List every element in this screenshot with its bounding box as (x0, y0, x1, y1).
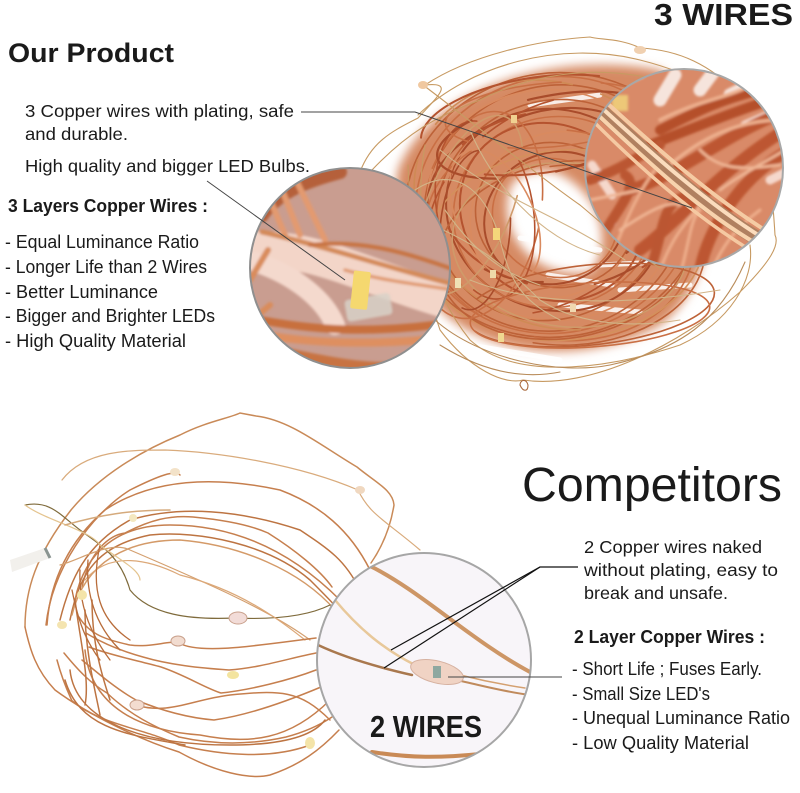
list: product benefits: - High Quality Material (5, 330, 186, 351)
list: product benefits: - Bigger and Brighter LEDs (5, 305, 215, 326)
text block: product callouts (25, 101, 310, 176)
label: 2 wires: 2 WIRES (370, 709, 482, 744)
list: competitor drawbacks: - Small Size LED's (572, 683, 710, 704)
text block: competitor callout: break and unsafe. (584, 583, 728, 603)
list: product benefits: - Longer Life than 2 Wires (5, 256, 207, 277)
text block: competitor callout: 2 Copper wires naked (584, 537, 762, 557)
callout lines: product (207, 112, 692, 280)
text block: competitor callout: without plating, easy to (583, 560, 778, 580)
product wire bottom: competitor coil (25, 413, 420, 776)
heading: 3 layers copper wires: 3 Layers Copper Wires : (8, 196, 208, 216)
list: competitor drawbacks (572, 658, 790, 753)
inset: three wires zoom (584, 68, 784, 268)
list: competitor drawbacks: - Low Quality Material (572, 732, 749, 753)
plug: white connector and LEDs (10, 468, 365, 749)
inset: LED bulb zoom (245, 165, 455, 375)
product photo: 3-wire copper coil (360, 35, 776, 390)
heading: 2 layer copper wires: 2 Layer Copper Wires : (574, 627, 765, 647)
text block: product callouts: High quality and bigger LED Bulbs. (25, 156, 310, 176)
list: competitor drawbacks: - Unequal Luminance Ratio (572, 707, 790, 728)
text block: competitor callout (583, 537, 778, 603)
list: product benefits: - Equal Luminance Ratio (5, 231, 199, 252)
text block: product callouts: 3 Copper wires with plating, safe (25, 101, 294, 121)
heading: competitors: Competitors (522, 459, 782, 512)
text block: product callouts: and durable. (25, 124, 128, 144)
inset: two wires zoom (317, 553, 531, 767)
list: competitor drawbacks: - Short Life ; Fuses Early. (572, 658, 762, 679)
title: our product: Our Product (8, 38, 174, 68)
list: product benefits: - Better Luminance (5, 281, 158, 302)
list: product benefits (5, 231, 215, 351)
callout lines: competitors (384, 567, 578, 677)
